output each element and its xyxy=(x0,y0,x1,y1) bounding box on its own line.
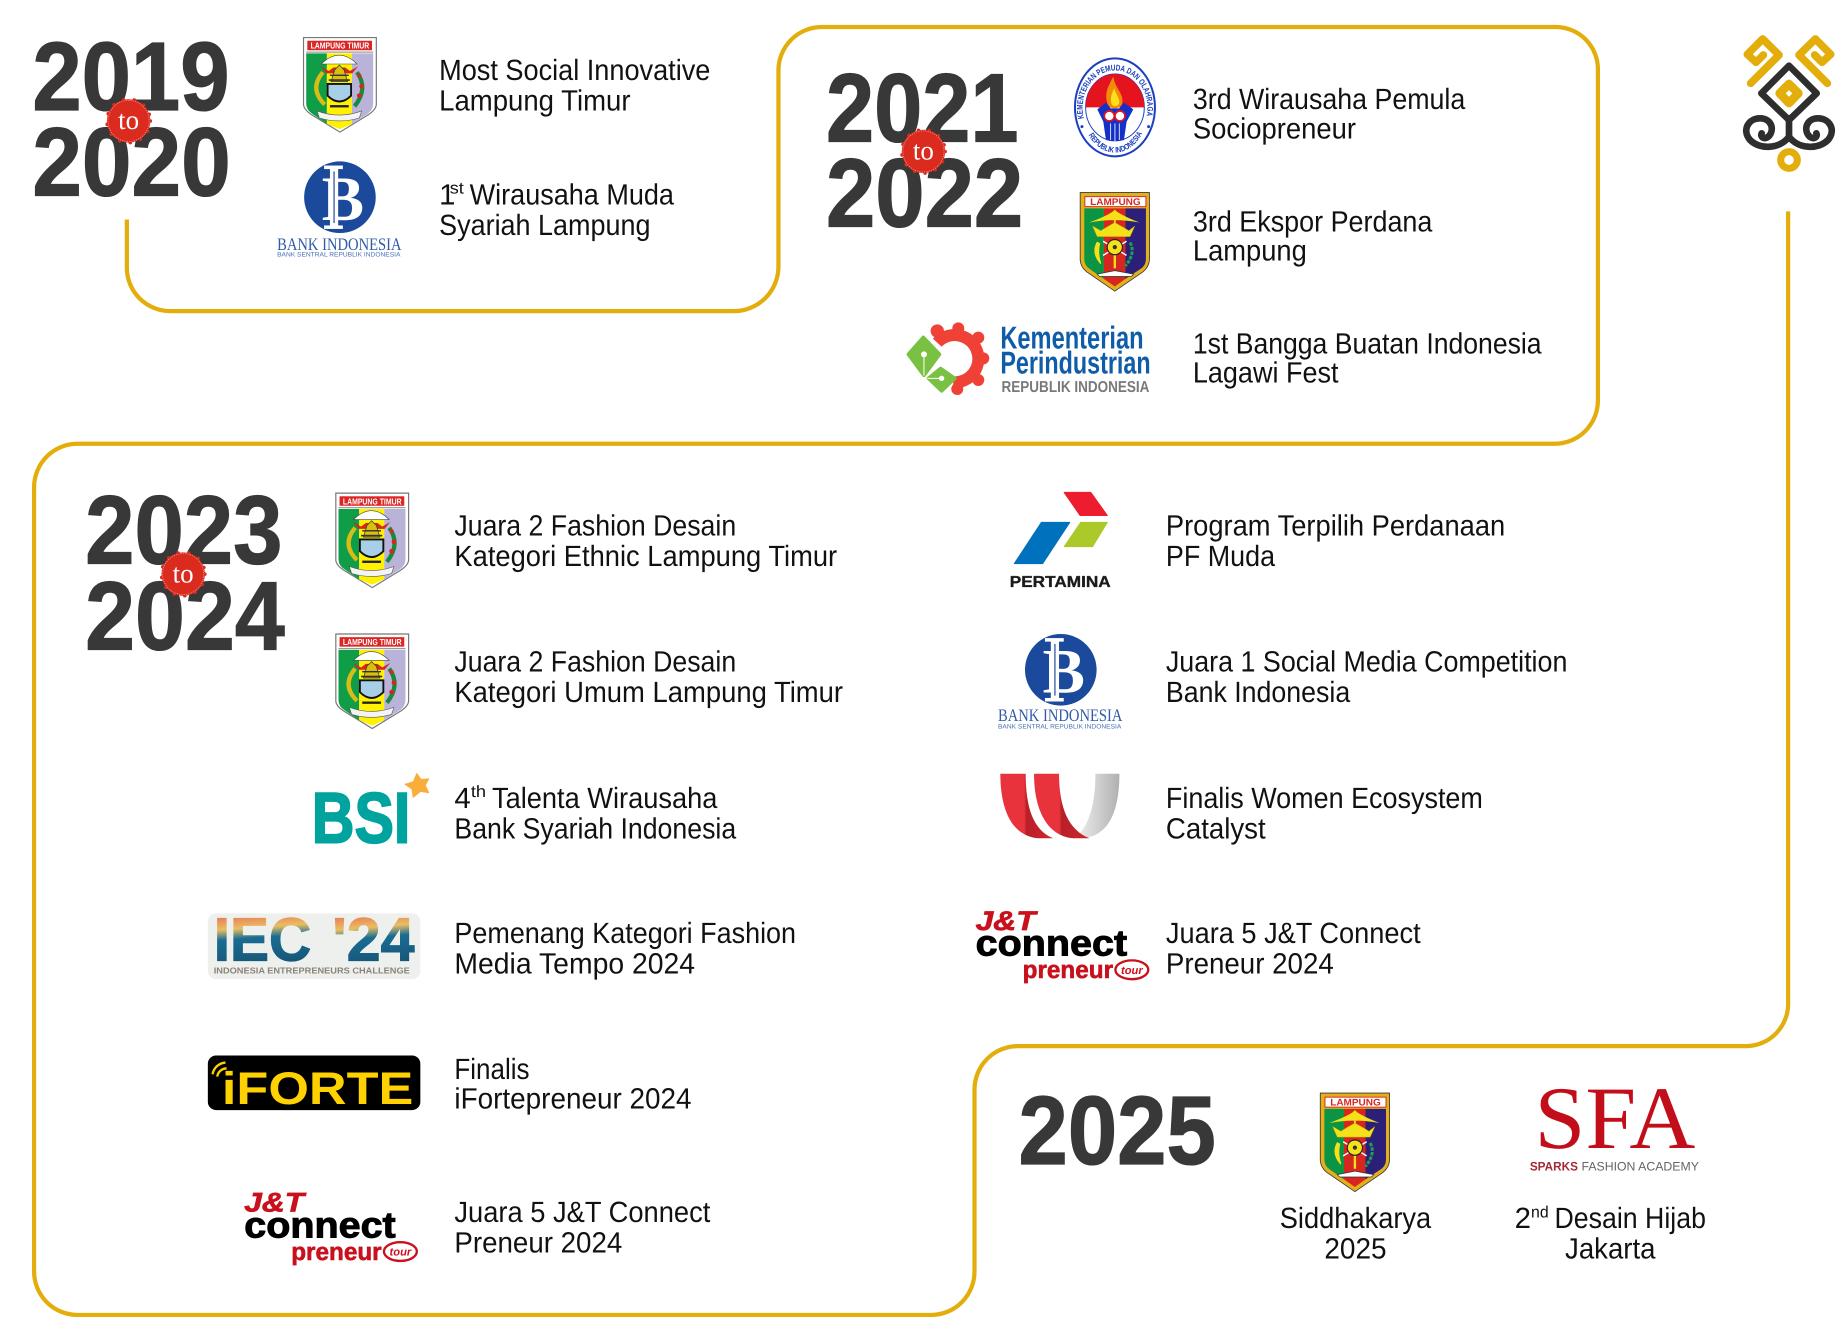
icon: Lampung Timur crest: LAMPUNG TIMUR xyxy=(343,496,402,507)
text: Juara 2 Fashion Desain Kategori Ethnic: Kategori Ethnic Lampung Timur xyxy=(454,540,837,573)
text: Juara 5 J&T Connect Preneur 2024: Juara 5 J&T Connect xyxy=(1166,917,1421,950)
panel: 2021 to 2022 xyxy=(826,53,1542,396)
text: Siddhakarya 2025: Siddhakarya xyxy=(1280,1202,1431,1235)
text: Most Social Innovative Lampung Timur: Lampung Timur xyxy=(439,85,631,117)
text: 3rd Wirausaha Pemula Sociopreneur: 3rd Wirausaha Pemula xyxy=(1193,83,1465,116)
text: Finalis iFortepreneur 2024: Finalis xyxy=(454,1053,530,1086)
icon: Lampung province crest xyxy=(1320,1093,1390,1192)
icon: IEC 24 logo: INDONESIA ENTREPRENEURS CHALLENGE xyxy=(214,965,410,976)
text: 3rd Wirausaha Pemula Sociopreneur xyxy=(1193,83,1465,146)
icon: Kementerian Perindustrian logo xyxy=(909,321,1151,396)
icon: Kementerian Perindustrian logo: REPUBLIK INDONESIA xyxy=(1002,378,1150,396)
text: 1st Wirausaha Muda Syariah Lampung: Wirausaha Muda xyxy=(470,178,674,211)
icon: Lampung province crest xyxy=(1080,193,1149,291)
text: Juara 5 J&T Connect Preneur 2024 xyxy=(454,1196,710,1260)
heading: years 2021 to 2022: to xyxy=(913,136,934,166)
icon: Women Ecosystem Catalyst logo xyxy=(1000,774,1119,838)
icon: Bank Indonesia logo: BANK SENTRAL REPUBLIK INDONESIA xyxy=(277,252,401,259)
text: Siddhakarya 2025 xyxy=(1280,1202,1431,1266)
icon: Lampung Timur crest: LAMPUNG TIMUR xyxy=(311,41,370,51)
icon: Bank Indonesia logo xyxy=(277,161,402,259)
icon: J&T Connect Preneur logo: connect xyxy=(976,923,1127,964)
text: 1st Wirausaha Muda Syariah Lampung: st xyxy=(450,178,464,197)
panel: 2019 to 2020 xyxy=(32,22,710,259)
text: Juara 5 J&T Connect Preneur 2024: Juara 5 J&T Connect xyxy=(454,1196,710,1229)
text: 1st Wirausaha Muda Syariah Lampung: Syariah Lampung xyxy=(439,209,650,242)
icon: IEC 24 logo: '24 xyxy=(332,906,415,974)
icon: Lampung Timur crest: LAMPUNG TIMUR xyxy=(343,637,402,647)
text: Juara 2 Fashion Desain Kategori Ethnic: Juara 2 Fashion Desain xyxy=(454,510,736,542)
text: 2nd Desain Hijab Jakarta: 2 xyxy=(1515,1202,1531,1235)
text: Finalis Women Ecosystem Catalyst xyxy=(1166,782,1483,845)
icon: Bank Indonesia logo: BANK SENTRAL REPUBLIK INDONESIA xyxy=(998,724,1122,731)
text: Juara 1 Social Media Competition Bank Indonesia xyxy=(1166,646,1567,709)
icon: SFA logo: SPARKS xyxy=(1530,1160,1578,1174)
text: Most Social Innovative Lampung Timur xyxy=(439,54,710,117)
icon: Bank Indonesia logo xyxy=(998,634,1123,731)
icon: SFA logo: FASHION ACADEMY xyxy=(1581,1160,1699,1174)
heading: years 2023 to 2024: 2024 xyxy=(85,561,285,670)
icon: Pertamina logo xyxy=(1010,493,1111,591)
text: 3rd Ekspor Perdana Lampung xyxy=(1193,205,1432,268)
icon: J&T Connect Preneur logo: J&T xyxy=(976,905,1038,936)
text: 3rd Ekspor Perdana Lampung: Lampung xyxy=(1193,235,1307,268)
text: Juara 2 Fashion Desain Kategori Umum xyxy=(454,646,843,709)
icon: ornament logo xyxy=(1746,39,1832,168)
icon: Kementerian Perindustrian logo: Perindustrian xyxy=(1000,345,1151,380)
text: Finalis Women Ecosystem Catalyst: Finalis Women Ecosystem xyxy=(1166,782,1483,815)
text: 4th Talenta Wirausaha Bank Syariah Indonesia: Talenta Wirausaha xyxy=(492,782,717,815)
text: Finalis Women Ecosystem Catalyst: Catalyst xyxy=(1166,812,1266,845)
icon: Lampung Timur crest xyxy=(336,493,409,588)
text: Siddhakarya 2025: 2025 xyxy=(1324,1233,1387,1266)
text: 2nd Desain Hijab Jakarta: Desain Hijab xyxy=(1554,1202,1706,1235)
text: 2nd Desain Hijab Jakarta: nd xyxy=(1531,1202,1549,1221)
heading: years 2019 to 2020 xyxy=(32,22,231,217)
heading: years 2019 to 2020: 2019 xyxy=(32,22,230,131)
text: 4th Talenta Wirausaha Bank Syariah Indonesia: 4 xyxy=(454,782,471,815)
heading: years 2023 to 2024 xyxy=(85,475,285,670)
text: 1st Wirausaha Muda Syariah Lampung xyxy=(439,178,674,242)
icon: J&T Connect Preneur logo: tour xyxy=(1121,964,1144,977)
text: 1st Bangga Buatan Indonesia Lagawi Fest: 1st Bangga Buatan Indonesia xyxy=(1193,328,1542,360)
icon: J&T Connect Preneur logo: preneur xyxy=(291,1239,382,1266)
icon: Kemenpora emblem: KEMENTERIAN PEMUDA DAN OLAHRAGA xyxy=(1076,64,1154,120)
heading: years 2021 to 2022 xyxy=(826,53,1023,248)
text: 4th Talenta Wirausaha Bank Syariah Indonesia: Bank Syariah Indonesia xyxy=(454,812,736,845)
icon: Kementerian Perindustrian logo: Kementerian xyxy=(1000,321,1144,356)
text: 3rd Ekspor Perdana Lampung: 3rd Ekspor Perdana xyxy=(1193,205,1432,238)
text: Juara 1 Social Media Competition Bank Indonesia: Juara 1 Social Media Competition xyxy=(1166,646,1567,679)
heading: years 2023 to 2024: 2023 xyxy=(85,475,282,585)
heading: years 2021 to 2022: 2022 xyxy=(826,139,1023,248)
text: 3rd Wirausaha Pemula Sociopreneur: Sociopreneur xyxy=(1193,113,1356,146)
text: Program Terpilih Perdanaan PF Muda: Program Terpilih Perdanaan xyxy=(1166,510,1505,542)
icon: Lampung province crest: LAMPUNG xyxy=(1330,1098,1381,1108)
icon: Bank Indonesia logo: B xyxy=(1043,636,1085,707)
icon: Bank Indonesia logo: BANK INDONESIA xyxy=(998,707,1123,726)
text: Juara 5 J&T Connect Preneur 2024 xyxy=(1166,917,1421,980)
text: Juara 5 J&T Connect Preneur 2024: Preneur 2024 xyxy=(454,1227,622,1260)
icon: J&T Connect Preneur logo: J&T xyxy=(244,1187,307,1218)
icon: Kemenpora emblem xyxy=(1074,57,1156,158)
text: Pemenang Kategori Fashion Media Tempo 2024 xyxy=(454,917,796,980)
panel: 2025 xyxy=(1019,1070,1706,1266)
icon: IEC 24 logo xyxy=(208,906,420,979)
text: Pemenang Kategori Fashion Media Tempo 2024: Pemenang Kategori Fashion xyxy=(454,917,796,950)
text: Finalis iFortepreneur 2024 xyxy=(454,1053,692,1115)
text: Program Terpilih Perdanaan PF Muda: PF Muda xyxy=(1166,540,1275,573)
icon: Lampung Timur crest xyxy=(304,38,376,132)
heading: years 2019 to 2020: to xyxy=(118,106,139,135)
heading: years 2019 to 2020: 2020 xyxy=(32,107,231,217)
icon: J&T Connect Preneur logo xyxy=(976,905,1148,984)
text: 1st Bangga Buatan Indonesia Lagawi Fest xyxy=(1193,328,1542,390)
text: 4th Talenta Wirausaha Bank Syariah Indonesia: th xyxy=(471,782,486,801)
heading: year 2025: 2025 xyxy=(1019,1076,1216,1185)
heading: years 2023 to 2024: to xyxy=(173,559,194,588)
text: Finalis iFortepreneur 2024: iFortepreneur 2024 xyxy=(454,1082,692,1115)
text: Most Social Innovative Lampung Timur: Most Social Innovative xyxy=(439,54,710,87)
text: Pemenang Kategori Fashion Media Tempo 2024: Media Tempo 2024 xyxy=(454,947,695,980)
text: Juara 5 J&T Connect Preneur 2024: Preneur 2024 xyxy=(1166,947,1334,980)
icon: Bank Indonesia logo: B xyxy=(322,164,364,234)
text: Juara 1 Social Media Competition Bank Indonesia: Bank Indonesia xyxy=(1166,676,1350,709)
icon: J&T Connect Preneur logo xyxy=(244,1187,417,1266)
icon: J&T Connect Preneur logo: tour xyxy=(390,1246,413,1259)
icon: Lampung province crest: LAMPUNG xyxy=(1090,197,1141,208)
text: 1st Wirausaha Muda Syariah Lampung: 1 xyxy=(439,178,455,211)
icon: IEC 24 logo: IEC xyxy=(214,906,311,974)
panel: 2023 to 2024 xyxy=(85,475,1567,1266)
icon: Pertamina logo: PERTAMINA xyxy=(1010,573,1111,591)
icon: J&T Connect Preneur logo: connect xyxy=(244,1205,396,1246)
text: 4th Talenta Wirausaha Bank Syariah Indonesia xyxy=(454,782,736,845)
heading: years 2021 to 2022: 2021 xyxy=(826,53,1019,163)
text: Juara 2 Fashion Desain Kategori Umum: Kategori Umum Lampung Timur xyxy=(454,676,843,709)
text: 2nd Desain Hijab Jakarta: Jakarta xyxy=(1565,1233,1656,1266)
icon: Kemenpora emblem: REPUBLIK INDONESIA xyxy=(1088,132,1142,153)
text: Program Terpilih Perdanaan PF Muda xyxy=(1166,510,1505,573)
icon: iForte logo: iFORTE xyxy=(222,1064,413,1115)
icon: iForte logo xyxy=(208,1055,420,1115)
text: Juara 2 Fashion Desain Kategori Umum: Juara 2 Fashion Desain xyxy=(454,646,736,679)
text: 1st Bangga Buatan Indonesia Lagawi Fest: Lagawi Fest xyxy=(1193,357,1339,390)
icon: Bank Indonesia logo: BANK INDONESIA xyxy=(277,236,402,255)
text: 2nd Desain Hijab Jakarta xyxy=(1515,1202,1706,1266)
icon: J&T Connect Preneur logo: preneur xyxy=(1023,957,1113,984)
text: Juara 2 Fashion Desain Kategori Ethnic xyxy=(454,510,837,573)
icon: Lampung Timur crest xyxy=(336,634,409,729)
icon: SFA logo: SFA xyxy=(1535,1070,1696,1168)
icon: BSI logo: BSI xyxy=(312,778,410,858)
